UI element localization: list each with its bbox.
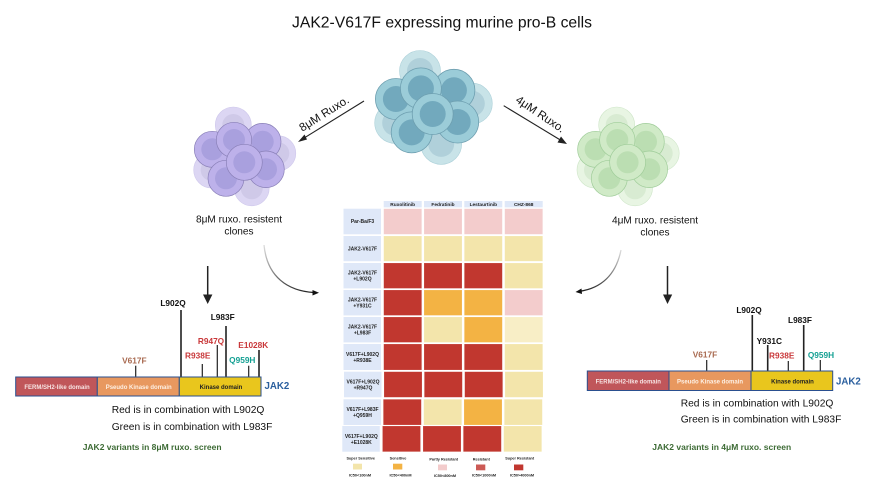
row: V617F+L902Q+E1028K: +E1028K (351, 440, 372, 446)
row: JAK2-V617F+L902Q: JAK2-V617F (348, 270, 377, 276)
mutation labels: Q959H (808, 350, 834, 360)
mutation labels: R938E (185, 351, 211, 361)
mutation stems (136, 310, 259, 378)
domain: FERM/SH2-like: FERM/SH2-like domain (24, 385, 90, 391)
legend: IC50<800nM (434, 474, 456, 478)
caption: 4µM screen: JAK2 variants in 4μM ruxo. screen (652, 442, 791, 452)
row: JAK2-V617F+L983F (344, 317, 543, 342)
legend: Super Sensitive (346, 456, 375, 460)
legend (346, 456, 535, 478)
row: V617F+L902Q+R947Q: +R947Q (354, 386, 372, 392)
row: JAK2-V617F+L983F: JAK2-V617F (348, 324, 377, 330)
panel: drug sensitivity heatmap (342, 201, 543, 478)
row: V617F+L902Q+E1028K (342, 426, 542, 452)
column headers: Lestaurtinib (470, 202, 497, 208)
column headers (384, 201, 543, 208)
legend: Sensitive (390, 456, 406, 460)
row: JAK2-V617F (344, 236, 543, 261)
mutation labels: V617F (693, 350, 717, 360)
mutation labels: L902Q (160, 298, 186, 308)
icon: purple resistant cell cluster (194, 107, 296, 206)
mutation labels (693, 305, 834, 361)
row: V617F+L902Q+R938E: +R938E (353, 358, 372, 364)
mutation labels: E1028K (238, 340, 268, 350)
row: V617F+L902Q+R938E: V617F+L902Q (346, 352, 379, 358)
domain: Pseudo Kinase (97, 377, 179, 396)
note: red combination: Red is in combination with L902Q (112, 405, 264, 416)
caption: 4µM clones: clones (640, 228, 670, 238)
arrow: left curved to heatmap (264, 245, 319, 296)
row: V617F+L983F+Q959H (344, 399, 542, 425)
legend: IC50<1000nM (472, 474, 496, 478)
arrow: right down to JAK2 map (663, 266, 672, 304)
caption: 8µM clones: 8μM ruxo. resistent (196, 214, 282, 226)
row: JAK2-V617F: JAK2-V617F (348, 246, 377, 252)
mutation labels: L983F (211, 312, 235, 322)
row: V617F+L902Q+R938E (344, 344, 543, 370)
mutation labels (122, 298, 268, 365)
domain: Kinase (179, 377, 261, 396)
row: JAK2-V617F+Y931C: +Y931C (353, 303, 372, 309)
note: green combination: Green is in combination with L983F (681, 414, 841, 425)
caption: 8µM clones: clones (224, 226, 254, 238)
label: 4µM Ruxo.: 4μM Ruxo. (513, 93, 567, 136)
arrow: parental to 4µM clones (504, 106, 567, 144)
caption: 8µM screen: JAK2 variants in 8μM ruxo. screen (83, 442, 222, 452)
row: V617F+L983F+Q959H: +Q959H (353, 413, 372, 419)
row: Par-Ba/F3 (344, 209, 543, 234)
arrow: left down to JAK2 map (203, 266, 212, 304)
domain: FERM/SH2-like (16, 377, 97, 396)
row: JAK2-V617F+L902Q (344, 263, 543, 288)
JAK2 label: JAK2 (836, 376, 861, 388)
label: 8µM Ruxo.: 8μM Ruxo. (297, 93, 352, 134)
mutation labels: Y931C (757, 336, 782, 346)
note: red combination: Red is in combination with L902Q (681, 398, 833, 409)
domain: FERM/SH2-like: FERM/SH2-like domain (596, 380, 661, 386)
row: V617F+L902Q+E1028K: V617F+L902Q (345, 434, 378, 440)
panel: JAK2 map, 4µM screen (587, 305, 861, 452)
legend: IC50<400nM (389, 474, 412, 478)
mutation labels: Q959H (229, 355, 255, 365)
legend: Super Resistant (505, 456, 535, 460)
legend: IC50<100nM (349, 474, 371, 478)
mutation labels: L983F (788, 315, 812, 325)
domain: Kinase: Kinase domain (771, 380, 814, 386)
arrow: parental to 8µM clones (298, 101, 364, 142)
row: JAK2-V617F+L983F: +L983F (354, 330, 371, 336)
caption: 4µM clones: 4μM ruxo. resistent (612, 216, 698, 226)
row: JAK2-V617F+Y931C (344, 290, 543, 315)
legend: Resistant (473, 458, 491, 462)
domain: Pseudo Kinase: Pseudo Kinase domain (106, 385, 172, 391)
column headers: CHZ-868 (514, 202, 534, 208)
domain: Pseudo Kinase (669, 371, 751, 390)
mutation labels: R938E (769, 351, 795, 361)
row: V617F+L983F+Q959H: V617F+L983F (346, 407, 379, 413)
domain: FERM/SH2-like (587, 371, 669, 390)
mutation labels: R947Q (198, 336, 225, 346)
title: JAK2-V617F expressing murine pro-B cells (292, 14, 592, 32)
mutation stems (707, 315, 820, 371)
mutation labels: V617F (122, 355, 147, 365)
column headers: Fedratinib (431, 202, 455, 208)
row: V617F+L902Q+R947Q (344, 372, 543, 397)
legend: Partly Resistant (429, 458, 459, 462)
icon: green resistant cell cluster (577, 107, 679, 206)
JAK2 label: JAK2 (264, 381, 289, 392)
icon: blue parental cell cluster (375, 50, 492, 164)
row: JAK2-V617F+Y931C: JAK2-V617F (348, 297, 377, 303)
row: JAK2-V617F+L902Q: +L902Q (353, 276, 372, 282)
legend: IC50>4000nM (510, 474, 534, 478)
column headers: Ruxolitinib (390, 202, 415, 208)
arrow: right curved to heatmap (576, 250, 621, 294)
mutation labels: L902Q (736, 305, 762, 315)
domain: Kinase (751, 371, 833, 390)
row: Par-Ba/F3: Par-Ba/F3 (351, 219, 374, 225)
domain: Kinase: Kinase domain (200, 385, 243, 391)
panel: JAK2 map, 8µM screen (16, 298, 289, 452)
row: V617F+L902Q+R947Q: V617F+L902Q (347, 380, 379, 386)
domain: Pseudo Kinase: Pseudo Kinase domain (677, 380, 743, 386)
note: green combination: Green is in combination with L983F (112, 422, 272, 433)
